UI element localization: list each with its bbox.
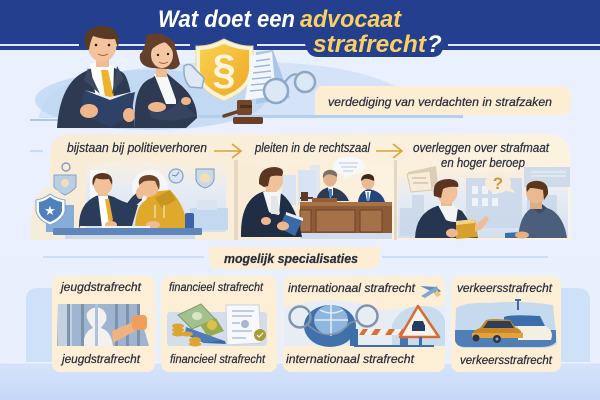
step title 3: en hoger beroep	[441, 156, 525, 170]
woman with crossed arms	[135, 34, 197, 128]
card: financieel strafrecht: financieel strafrecht	[169, 280, 264, 294]
scene 2: courtroom	[238, 157, 394, 240]
man with book	[57, 26, 135, 128]
arrow 1	[214, 144, 241, 158]
lawyer seated	[79, 173, 138, 229]
book	[279, 212, 303, 236]
panel: process steps	[30, 134, 570, 240]
icon: money and document	[167, 304, 267, 346]
icon: star shield	[31, 187, 74, 240]
title: advocaat	[300, 6, 402, 33]
speech bubble with question mark	[485, 173, 516, 193]
icon: youth behind bars	[57, 304, 149, 346]
hero backdrop	[30, 62, 463, 130]
icon: note	[407, 166, 438, 192]
scene 3: consultation	[398, 166, 570, 239]
title: ?	[427, 31, 442, 58]
card: internationaal strafrecht: internationaal strafrecht	[286, 352, 415, 366]
arrow 2	[376, 144, 402, 158]
card: verkeersstrafrecht: verkeersstrafrecht	[457, 281, 553, 295]
icon: shield badge	[196, 39, 253, 101]
step title 3: overleggen over strafmaat	[413, 141, 549, 155]
card: internationaal strafrecht: internationaal strafrecht	[288, 281, 416, 295]
icon: fingerprint badge	[196, 169, 214, 188]
header band	[0, 0, 600, 50]
title	[158, 6, 446, 58]
icon: cars in traffic	[455, 299, 557, 348]
card: jeugdstrafrecht: jeugdstrafrecht	[60, 352, 141, 366]
speech bubble with question mark: ?	[493, 174, 503, 193]
card: jeugdstrafrecht	[52, 276, 155, 372]
section heading: mogelijk specialisaties	[43, 247, 548, 269]
card: jeugdstrafrecht: jeugdstrafrecht	[59, 280, 142, 294]
icon: star shield: ★	[44, 203, 56, 218]
bottom band	[0, 288, 600, 400]
judge right	[358, 174, 385, 202]
label: verdediging	[315, 86, 571, 115]
suspect in hoodie	[126, 170, 194, 230]
step title 2: pleiten in de rechtszaal	[254, 141, 371, 155]
step title 1: bijstaan bij politieverhoren	[67, 141, 207, 155]
card: financieel strafrecht	[161, 276, 277, 372]
icon: small gavel	[300, 192, 337, 202]
title: strafrecht	[313, 31, 427, 58]
icon: globe and handcuffs	[284, 300, 445, 347]
info board	[524, 167, 570, 187]
barrier	[350, 329, 434, 347]
icon: warning triangle	[400, 306, 439, 345]
section heading: mogelijk specialisaties: mogelijk specialisaties	[224, 252, 358, 266]
lawyer in toga	[241, 167, 303, 237]
icon: handcuffs	[264, 72, 315, 103]
consulting client	[505, 180, 567, 238]
judge left	[316, 170, 349, 201]
card: verkeersstrafrecht	[451, 276, 561, 372]
icon: gavel	[224, 100, 263, 124]
card: financieel strafrecht: financieel strafrecht	[170, 352, 266, 366]
step title 3	[413, 141, 549, 170]
card: internationaal strafrecht	[283, 276, 445, 372]
label: verdediging: verdediging van verdachten in strafzaken	[328, 95, 552, 109]
icon: airplane	[420, 286, 441, 298]
bench	[300, 202, 392, 239]
card: verkeersstrafrecht: verkeersstrafrecht	[460, 353, 553, 367]
icon: clock	[169, 169, 183, 183]
panel divider lines	[234, 160, 397, 240]
icon: shield badge: §	[212, 46, 236, 93]
title: Wat doet een	[158, 6, 295, 33]
icon: document	[245, 50, 290, 104]
icon: person shield	[54, 163, 76, 195]
man in toga with book	[415, 179, 489, 239]
speech bubble	[333, 157, 365, 180]
table	[53, 226, 202, 239]
scene 1: police interrogation	[31, 161, 228, 240]
icon: left badge	[184, 64, 204, 88]
